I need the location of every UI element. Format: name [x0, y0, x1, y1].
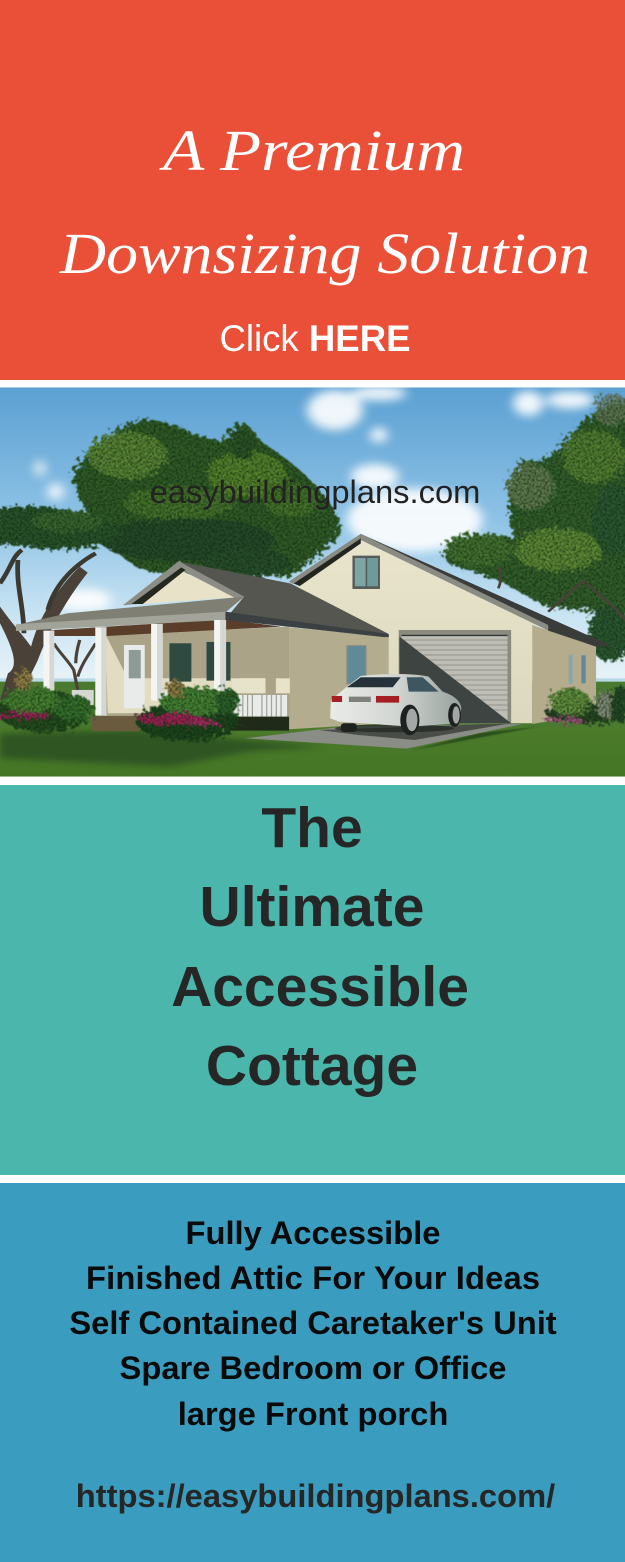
house [16, 534, 612, 731]
panel: house photo [0, 386, 625, 777]
heading: The Ultimate Accessible Cottage: Ultimate [200, 875, 424, 939]
heading: The Ultimate Accessible Cottage [171, 796, 469, 1098]
small gable [142, 570, 236, 604]
garage surround [399, 630, 511, 723]
horizon [0, 678, 625, 682]
heading: The Ultimate Accessible Cottage: Cottage [206, 1034, 418, 1098]
base and steps [229, 717, 289, 731]
side wall [532, 625, 596, 724]
small distant tree [54, 640, 96, 690]
feature list: Self Contained Caretaker's Unit [69, 1304, 557, 1341]
porch windows [169, 643, 191, 682]
soffit [44, 619, 281, 636]
sky [0, 387, 625, 684]
car [330, 674, 461, 735]
right porch wall [289, 627, 389, 729]
hip roof [179, 562, 389, 637]
website url: https://easybuildingplans.com/ [76, 1477, 555, 1514]
lit wall sections [106, 635, 265, 713]
side wall window [347, 646, 366, 684]
watermark text: easybuildingplans.com [150, 473, 480, 510]
heading: The Ultimate Accessible Cottage: The [261, 796, 363, 860]
side windows [569, 655, 573, 684]
lawn [0, 727, 625, 777]
porch roof [16, 597, 244, 626]
feature list: Finished Attic For Your Ideas [86, 1259, 540, 1296]
main roof [361, 534, 612, 647]
heading: A Premium: A Premium [158, 118, 465, 183]
call to action: Click HERE [219, 318, 411, 359]
panel: teal title [0, 785, 625, 1175]
feature list: Fully Accessible [186, 1214, 440, 1251]
garage shadow [399, 637, 511, 723]
plants: right [544, 685, 625, 724]
car wheels [400, 705, 419, 735]
driveway [245, 724, 522, 749]
panel: red header [0, 0, 625, 380]
door [124, 645, 145, 708]
rear porch wall [106, 627, 289, 729]
plants: centre [136, 679, 239, 741]
car windows [347, 677, 401, 687]
tree: centre [72, 420, 340, 578]
feature list: Spare Bedroom or Office [120, 1349, 506, 1386]
feature list [69, 1214, 557, 1432]
car lights and plate [332, 696, 342, 702]
tree: left [0, 507, 121, 700]
attic window [352, 556, 380, 589]
columns [43, 620, 226, 716]
plants: left [0, 669, 94, 732]
heading: The Ultimate Accessible Cottage: Accessible [171, 955, 469, 1019]
main gable wall [298, 540, 540, 724]
feature list: large Front porch [178, 1395, 448, 1432]
trees: right [443, 393, 625, 662]
heading: Downsizing Solution: Downsizing Solution [59, 221, 590, 286]
railing [72, 690, 287, 717]
clouds [35, 386, 594, 611]
panel: blue features [0, 1183, 625, 1562]
